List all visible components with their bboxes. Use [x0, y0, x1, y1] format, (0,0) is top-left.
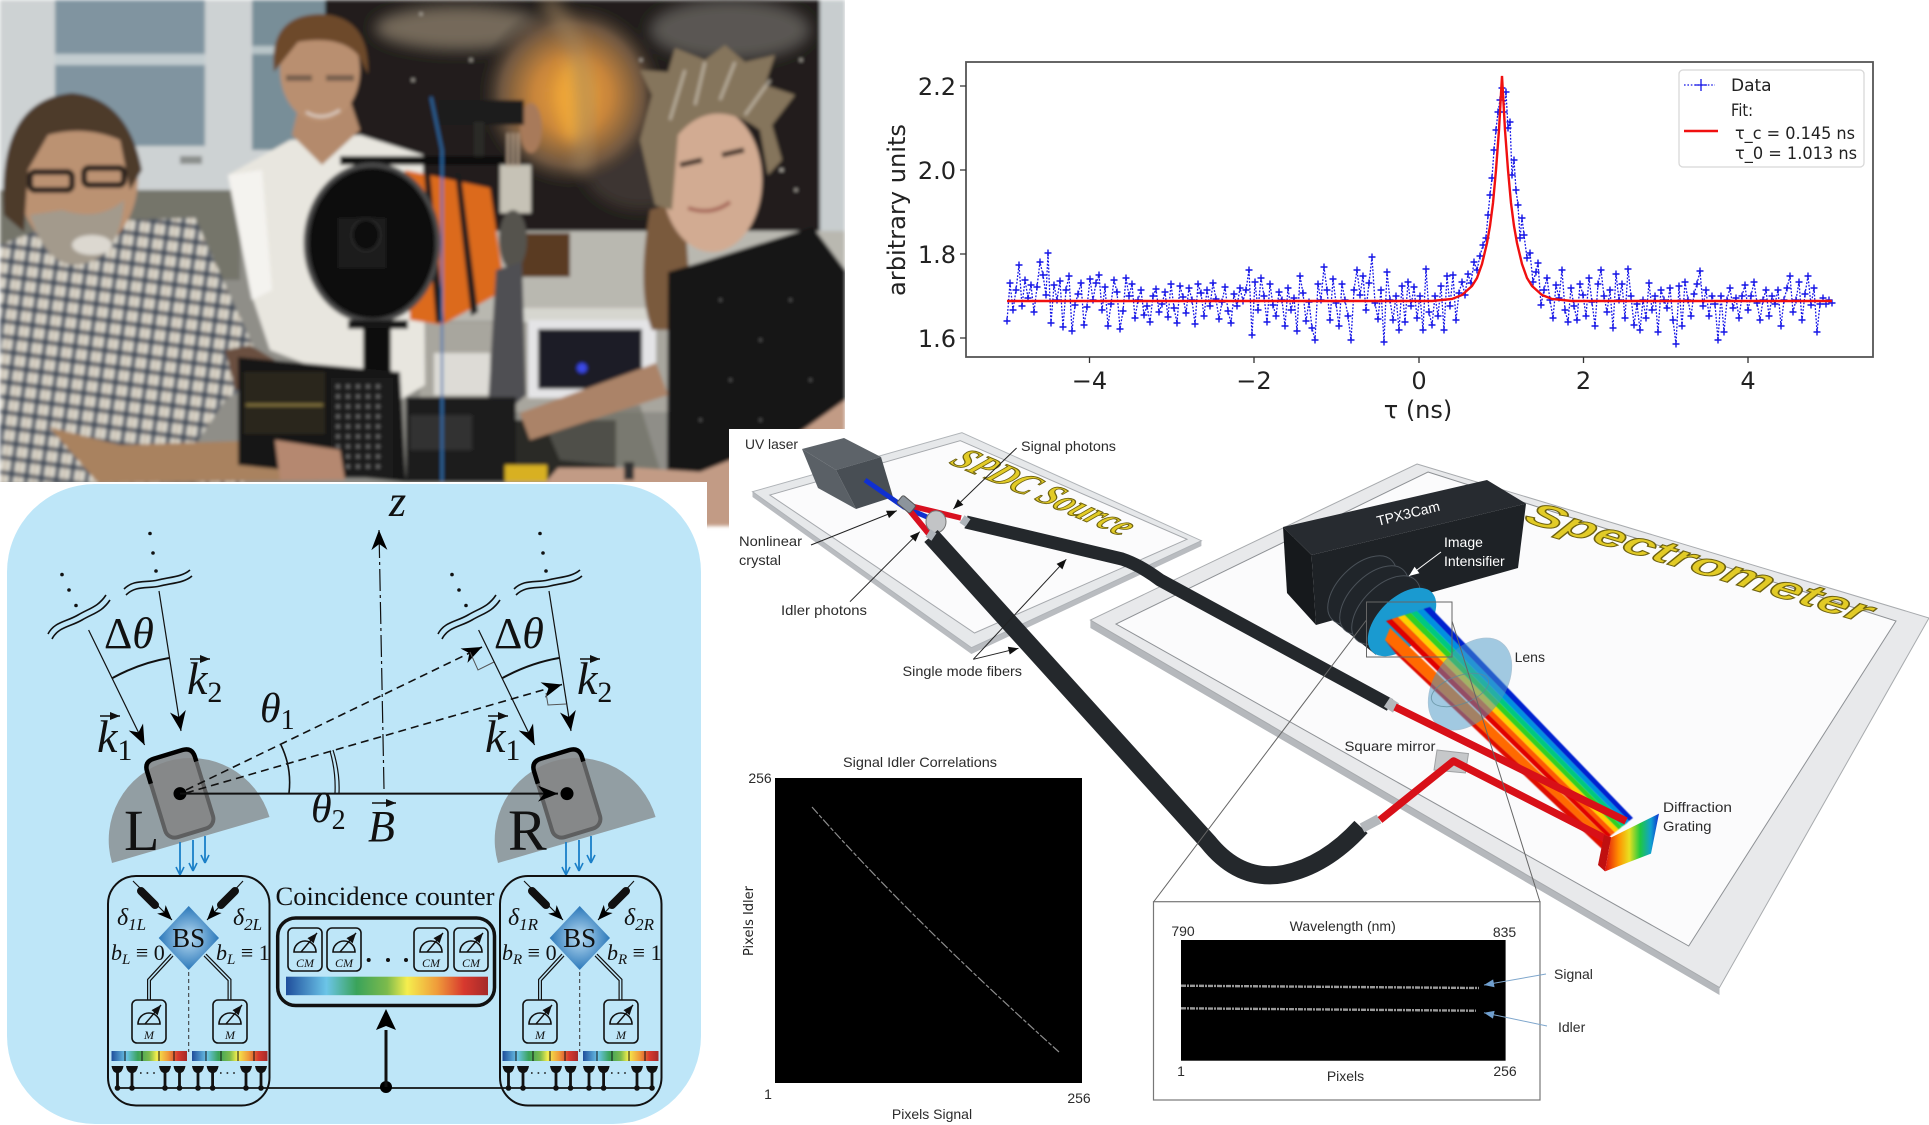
coincidence counter	[276, 882, 495, 1006]
setup labels: crystal	[739, 552, 781, 568]
panel: Bell test diagram	[7, 477, 701, 1124]
left module: ≡ 1	[235, 940, 270, 965]
math labels: 2	[597, 676, 612, 709]
right module: δ	[624, 905, 635, 931]
chart: signal idler correlations: 256	[748, 770, 772, 786]
math labels: 2	[332, 805, 346, 836]
icon: TPX3Cam camera	[1283, 480, 1526, 669]
middle person	[228, 14, 542, 400]
x axis ticks and labels: −4	[1072, 367, 1107, 395]
inset: spectrum on camera: 1	[1177, 1063, 1185, 1079]
math labels: 1	[505, 734, 520, 767]
chart: signal idler correlations	[742, 754, 1091, 1122]
inset: spectrum on camera: Wavelength (nm)	[1290, 918, 1396, 934]
setup labels: Nonlinear	[739, 533, 802, 549]
inset: spectrum on camera: 835	[1493, 924, 1516, 940]
setup labels: Single mode fibers	[902, 663, 1022, 679]
plot frame	[966, 62, 1873, 357]
right station	[495, 747, 656, 863]
right module: ≡ 0	[522, 940, 557, 965]
math labels: k	[485, 711, 505, 762]
math labels: k	[577, 653, 597, 704]
white backdrop below photo	[0, 482, 707, 1125]
setup labels: Signal photons	[1021, 438, 1116, 454]
icon: diffraction grating	[1598, 814, 1659, 871]
y axis ticks and labels: 2.2	[918, 73, 956, 101]
chart: signal idler correlations: Pixels Idler	[742, 885, 757, 956]
y axis ticks and labels: 1.6	[918, 325, 956, 353]
panel background	[7, 484, 701, 1124]
left module: 2L	[244, 915, 262, 934]
y axis title: arbitrary units	[883, 124, 911, 296]
right module: M	[615, 1028, 627, 1042]
right person	[520, 45, 845, 526]
right module: b	[502, 940, 513, 965]
x axis ticks and labels: 2	[1576, 367, 1591, 395]
wall under cabinet	[0, 190, 240, 280]
cabinets	[0, 0, 330, 192]
left person	[0, 93, 345, 483]
setup labels: Diffraction	[1663, 799, 1732, 815]
math labels: k	[187, 653, 207, 704]
icon: TPX3Cam camera: Intensifier	[1444, 553, 1505, 569]
y axis ticks and labels: 2.0	[918, 157, 956, 185]
setup labels: UV laser	[745, 436, 798, 452]
bus line and arrow to coincidence counter	[117, 1009, 652, 1093]
math labels: 1	[281, 705, 295, 736]
left module: M	[224, 1028, 236, 1042]
math labels	[97, 609, 612, 851]
inset: spectrum on camera: Pixels	[1327, 1068, 1364, 1084]
right module: b	[607, 940, 618, 965]
inset: spectrum on camera: Signal	[1554, 966, 1593, 982]
x axis ticks and labels: −2	[1236, 367, 1272, 395]
white backdrop right side	[729, 0, 1929, 1125]
inset: spectrum on camera: 790	[1171, 923, 1195, 939]
right module: ≡ 1	[627, 940, 662, 965]
leader arrows	[811, 448, 1066, 659]
setup labels: Square mirror	[1344, 738, 1436, 754]
fit curve	[1007, 76, 1832, 301]
right module: δ	[508, 905, 519, 931]
math labels: θ	[311, 786, 332, 832]
diffracted rainbow beams	[1385, 607, 1633, 849]
left module: δ	[233, 905, 244, 931]
math labels: Δθ	[104, 609, 154, 658]
legend: Fit:	[1731, 101, 1753, 121]
math labels: k	[97, 711, 117, 762]
left module: L	[226, 952, 235, 968]
z axis: z	[388, 477, 406, 526]
coincidence counter: CM	[462, 956, 481, 970]
setup labels: Idler photons	[781, 602, 867, 618]
x axis ticks and labels: 0	[1411, 367, 1427, 395]
setup labels	[739, 436, 1732, 834]
icon: lens	[1411, 622, 1529, 746]
right beams	[438, 532, 582, 745]
left beams	[48, 532, 192, 745]
coincidence counter: Coincidence counter	[276, 882, 495, 911]
coincidence counter: CM	[296, 956, 315, 970]
y axis ticks and labels	[918, 73, 966, 353]
inset: spectrum on camera: 256	[1493, 1063, 1517, 1079]
chart: signal idler correlations: 1	[764, 1086, 772, 1102]
z axis	[379, 477, 406, 789]
right module: BS	[563, 923, 596, 953]
setup labels: Lens	[1515, 649, 1545, 665]
chart: coincidence peak vs time	[883, 62, 1873, 424]
math labels: Δθ	[494, 609, 544, 658]
chart: signal idler correlations: 256	[1067, 1090, 1091, 1106]
left module	[108, 876, 270, 1106]
setup labels: Grating	[1663, 818, 1712, 834]
math labels: B	[368, 802, 395, 851]
icon: TPX3Cam camera: TPX3Cam	[1375, 498, 1441, 529]
icon: TPX3Cam camera: Image	[1444, 534, 1483, 550]
x axis ticks and labels	[1072, 357, 1756, 395]
SPDC Source lettering: SPDC Source	[941, 442, 1149, 542]
zoom guide box and lines	[1154, 602, 1540, 902]
left module: b	[111, 940, 122, 965]
panel: SPDC source board	[752, 433, 1201, 654]
right module	[500, 876, 662, 1106]
red fiber output beams	[1380, 707, 1626, 842]
optical source assembly	[865, 480, 961, 534]
icon: square mirror	[1434, 750, 1468, 773]
inset: spectrum on camera: Idler	[1558, 1019, 1586, 1035]
galaxy painting	[325, 0, 820, 231]
panel: spectrometer board	[1090, 464, 1929, 995]
icon: UV laser box	[802, 438, 893, 509]
legend: τ_c = 0.145 ns	[1735, 124, 1855, 144]
x axis title: τ (ns)	[1384, 396, 1452, 424]
baseline and dashed lines	[180, 647, 566, 794]
left module: b	[216, 940, 227, 965]
right module: 2R	[635, 915, 655, 934]
right module: R	[617, 952, 627, 968]
wall and counter right	[820, 0, 845, 231]
x axis ticks and labels: 4	[1740, 367, 1756, 395]
legend: Data	[1731, 76, 1772, 96]
left module: L	[121, 952, 130, 968]
left module: M	[143, 1028, 155, 1042]
left module: 1L	[128, 915, 146, 934]
y axis ticks and labels: 1.8	[918, 241, 956, 269]
chart: signal idler correlations: Signal Idler Correlations	[843, 754, 997, 770]
legend	[1679, 70, 1864, 167]
blue signal arrows	[180, 836, 591, 875]
right module: R	[512, 952, 522, 968]
chart: signal idler correlations: Pixels Signal	[892, 1106, 972, 1122]
math labels: 1	[117, 734, 132, 767]
data series	[1007, 88, 1832, 344]
left module: ≡ 0	[130, 940, 165, 965]
image intensifier	[1315, 543, 1433, 657]
left station	[109, 747, 270, 863]
left module: δ	[117, 905, 128, 931]
inset: spectrum on camera	[1154, 902, 1593, 1100]
photo: three researchers with telescope	[0, 0, 845, 526]
coincidence counter: CM	[422, 956, 441, 970]
Spectrometer lettering: Spectrometer	[1517, 496, 1884, 630]
left module: BS	[172, 923, 205, 953]
right station: R	[508, 798, 547, 863]
left station: L	[124, 798, 159, 863]
right module: 1R	[519, 915, 539, 934]
legend: τ_0 = 1.013 ns	[1735, 144, 1857, 164]
math labels: θ	[260, 686, 281, 732]
monitor	[528, 320, 656, 398]
single mode fibers	[928, 519, 1396, 875]
right module: M	[534, 1028, 546, 1042]
oscilloscope	[238, 357, 406, 482]
coincidence counter: CM	[335, 956, 354, 970]
math labels: 2	[207, 676, 222, 709]
telescope	[306, 97, 660, 482]
